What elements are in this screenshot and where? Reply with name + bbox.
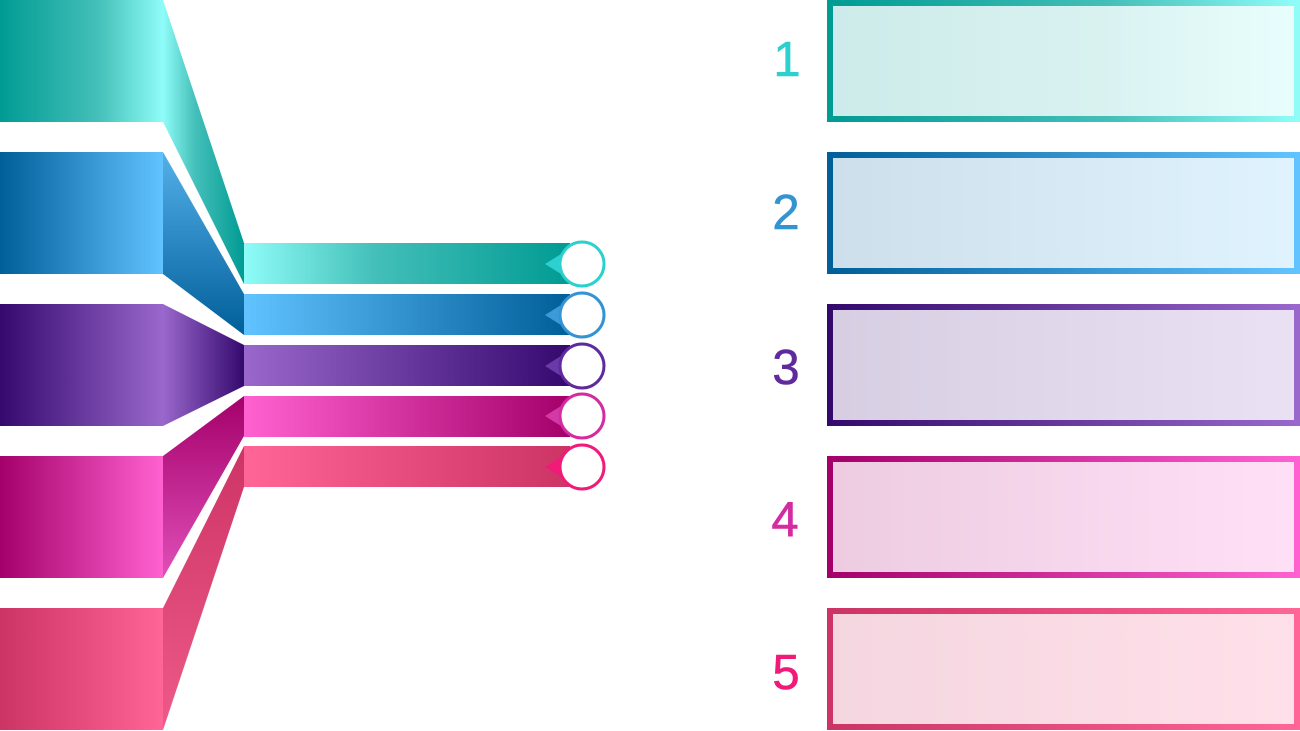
circle markers — [545, 242, 604, 489]
item 2 — [772, 155, 1297, 271]
number 1: 1 — [773, 33, 801, 87]
number 4: 4 — [771, 493, 799, 547]
number 3: 3 — [772, 341, 800, 395]
text box 2 — [830, 155, 1297, 271]
ribbon 1: teal — [0, 0, 570, 284]
marker 4 — [545, 394, 604, 438]
item 5 — [772, 611, 1297, 727]
text box 4 — [830, 459, 1297, 575]
ribbon 4: magenta — [0, 396, 570, 578]
marker 1 — [545, 242, 604, 286]
number 2: 2 — [772, 186, 800, 240]
marker 3 — [545, 344, 604, 388]
ribbon 3: purple — [0, 304, 570, 426]
numbered list — [771, 3, 1297, 727]
ribbon 2: blue — [0, 152, 570, 335]
text box 1 — [830, 3, 1297, 119]
ribbon 5: pink — [0, 446, 570, 730]
text box 3 — [830, 307, 1297, 423]
item 3 — [772, 307, 1297, 423]
item 4 — [771, 459, 1297, 575]
text box 5 — [830, 611, 1297, 727]
number 5: 5 — [772, 646, 800, 700]
marker 5 — [545, 445, 604, 489]
marker 2 — [545, 293, 604, 337]
item 1 — [773, 3, 1297, 119]
funnel ribbons — [0, 0, 570, 730]
